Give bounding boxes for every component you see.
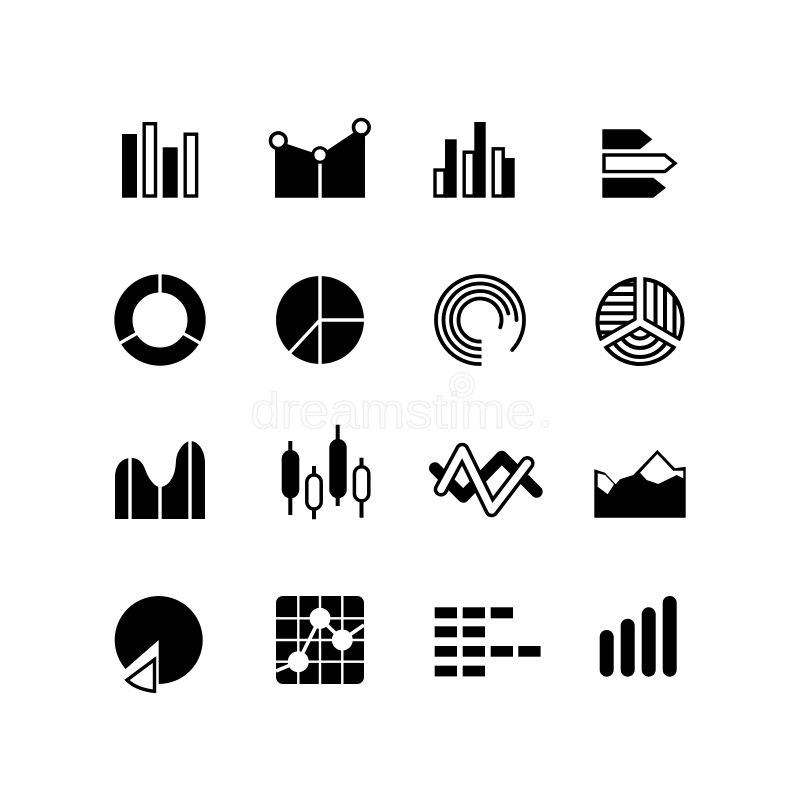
icon: paired bar chart — [435, 122, 515, 198]
icon: arrow signpost bars — [602, 129, 675, 198]
icon: pie chart with detached wedge — [110, 596, 203, 700]
icon: mountain area chart — [594, 450, 686, 518]
watermark — [250, 372, 548, 439]
icon: line chart on grid — [276, 596, 364, 684]
icon: rising rounded bars — [600, 596, 677, 677]
icon: bar chart with outlined bars — [122, 124, 197, 198]
watermark spiral — [450, 372, 548, 428]
icon: striped pie chart — [596, 277, 684, 366]
icon: candlestick chart — [282, 425, 369, 519]
icon: dashed block bars — [435, 607, 541, 676]
watermark wordmark: dreamstime — [250, 383, 536, 439]
icon: intertwined line chart — [435, 450, 537, 510]
icon set: sixteen chart icons — [114, 118, 686, 694]
icon: pie chart — [276, 270, 370, 370]
icon: segmented donut chart — [108, 265, 212, 357]
icon: smooth area chart — [115, 435, 205, 520]
icon: area chart with circle markers — [270, 120, 369, 198]
icon: concentric radial arcs — [436, 276, 524, 364]
